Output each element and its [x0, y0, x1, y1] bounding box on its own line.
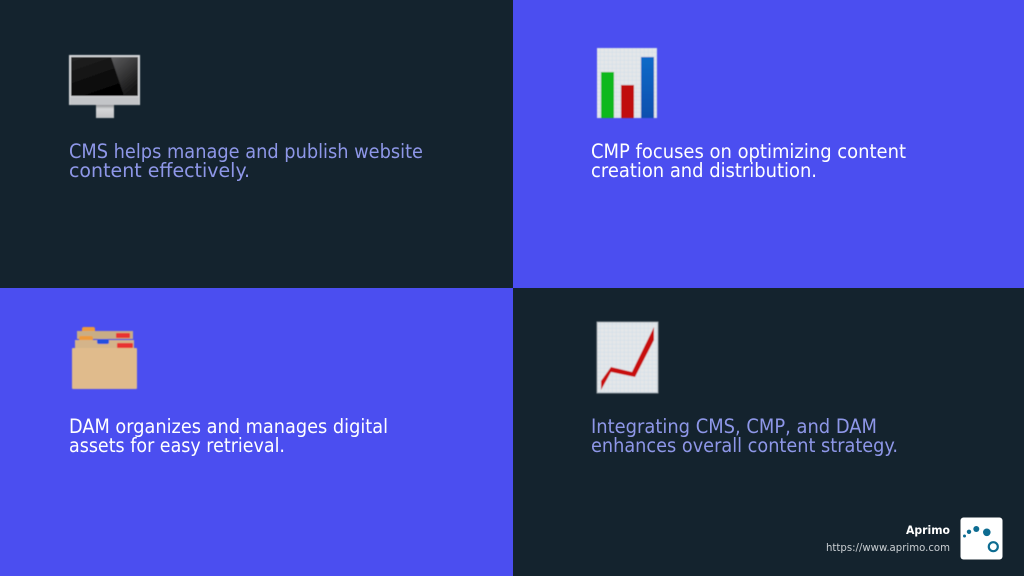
- icon: desktop monitor: [69, 55, 140, 118]
- text: DAM description: assets for easy retrieval.: [69, 434, 285, 457]
- panel: CMS: [0, 0, 513, 288]
- brand: Aprimo name and URL: Aprimo: [906, 523, 950, 537]
- panel: integration: [513, 288, 1024, 576]
- text: integration description: Integrating CMS, CMP, and DAM: [591, 415, 877, 438]
- brand: Aprimo name and URL: https://www.aprimo.com: [826, 541, 950, 554]
- icon: file box: [72, 327, 137, 389]
- text: integration description: enhances overall content strategy.: [591, 434, 898, 457]
- panel: DAM: [0, 288, 513, 576]
- text: CMP description: creation and distribution.: [591, 159, 817, 182]
- icon: rising line chart: [597, 322, 658, 393]
- icon: bar chart: [597, 48, 657, 118]
- text: DAM description: DAM organizes and manages digital: [69, 415, 388, 438]
- text: CMP description: CMP focuses on optimizing content: [591, 140, 906, 163]
- brand: Aprimo name and URL: [826, 523, 950, 554]
- text: CMS description: CMS helps manage and publish website: [69, 140, 423, 163]
- panel: CMP: [513, 0, 1024, 288]
- icon: Aprimo logo: [960, 518, 1002, 560]
- text: CMS description: content effectively.: [69, 159, 250, 182]
